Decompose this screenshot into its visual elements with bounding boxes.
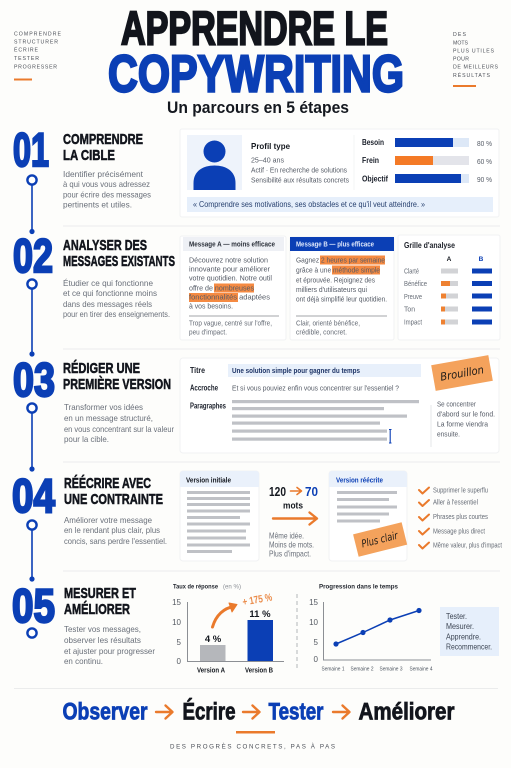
step 2 text: ANALYSER DES [63, 237, 147, 254]
bar chart: response rate: 5 [177, 638, 182, 647]
panel: message A: peu d'impact. [189, 330, 227, 336]
panel: analysis grid: Ton [404, 306, 415, 314]
panel: rewritten version [329, 471, 407, 561]
step 4 text: en le rendant plus clair, plus [64, 525, 160, 535]
step 2 text: et ce qui fonctionne moins [63, 288, 157, 298]
step 3 text [13, 353, 174, 444]
right top note [453, 32, 499, 87]
step 4 text: Améliorer votre message [64, 515, 152, 525]
right top note: POUR [453, 56, 469, 62]
panel: message A: innovante pour améliorer [189, 264, 270, 274]
step 5 text: observer les résultats [64, 635, 141, 645]
step 5 text: AMÉLIORER [64, 601, 130, 618]
left top note [14, 32, 62, 80]
word count change [269, 484, 318, 558]
panel: first draft: Titre [190, 366, 206, 375]
step 4 text: 04 [12, 469, 55, 522]
step 2 text: Étudier ce qui fonctionne [63, 278, 153, 288]
note: d'abord sur le fond. [437, 410, 495, 418]
profile text: Profil type [251, 141, 290, 151]
left top note: STRUCTURER [14, 40, 58, 46]
sticker: plus clair [353, 522, 407, 557]
bar chart: needs: 90 % [477, 175, 492, 184]
panel: target profile [180, 129, 499, 217]
panel: message A: votre quotidien. Notre outil [189, 274, 272, 282]
line chart: progression: 0 [314, 655, 319, 664]
panel: rewritten version: Version réécrite [336, 476, 383, 484]
panel: message B: crédible, concret. [296, 330, 347, 336]
line chart: progression: 5 [314, 638, 319, 647]
step 1 text: Identifier précisément [63, 169, 144, 179]
panel: message A: Trop vague, centré sur l'offre, [189, 320, 272, 328]
line chart: progression: Semaine 4 [410, 666, 433, 672]
step 5 text: et ajuster pour progresser [64, 646, 155, 656]
panel: analysis grid: Bénéfice [404, 281, 427, 288]
panel: message B: milliers d'utilisateurs qui [296, 285, 367, 294]
step 2 text: MESSAGES EXISTANTS [63, 253, 175, 270]
panel: analysis grid: A [447, 256, 452, 263]
panel: message A: offre de nombreuses [189, 284, 254, 292]
line chart: progression: Progression dans le temps [319, 584, 398, 590]
step 5 text: Tester vos messages, [64, 624, 141, 634]
step 3 text: pour la cible. [64, 434, 109, 444]
step 1 text: 01 [13, 123, 49, 176]
line chart: progression: 15 [309, 598, 319, 607]
line chart: progression [309, 584, 433, 672]
note: ensuite. [437, 430, 460, 438]
panel: message B: Message B — plus efficace [296, 240, 374, 248]
step 1 text: LA CIBLE [63, 147, 115, 164]
callout: test loop: Recommencer. [446, 642, 492, 652]
step 2 text: pour en tirer des enseignements. [63, 309, 170, 319]
right top note: PLUS UTILES [453, 48, 495, 54]
bar chart: response rate: 4 % [205, 634, 222, 645]
left top note: PROGRESSER [14, 64, 57, 70]
profile text: Sensibilité aux résultats concrets [251, 176, 349, 184]
step 3 text: 03 [13, 353, 55, 406]
panel: initial version [180, 471, 259, 561]
checklist: Message plus direct [433, 528, 485, 536]
arrow: growth [212, 606, 234, 627]
panel: initial version: Version initiale [186, 476, 231, 484]
panel: first draft: Accroche [190, 384, 219, 392]
profile text [251, 141, 349, 184]
right top note: DE MEILLEURS [453, 65, 499, 71]
footer tagline: DES PROGRÈS CONCRETS, PAS À PAS [170, 744, 335, 750]
note: La forme viendra [437, 420, 489, 428]
footer cycle: Améliorer [358, 698, 454, 726]
word count change: Même idée. [269, 530, 304, 540]
right top note: DES [453, 32, 467, 38]
bar chart: needs: Objectif [362, 174, 388, 184]
bar chart: response rate: 15 [172, 598, 182, 607]
bar chart: response rate: Taux de réponse [173, 584, 218, 590]
word count change: 120 [269, 484, 286, 499]
icon: persona [187, 135, 242, 190]
sticker: brouillon: Brouillon [439, 363, 485, 384]
growth label: + 175 % [242, 591, 274, 608]
footer cycle [62, 698, 454, 726]
panel: message A: Message A — moins efficace [189, 240, 275, 248]
timeline [27, 175, 37, 638]
sticker: brouillon [431, 355, 493, 391]
right top note: MOTS [453, 40, 469, 46]
callout: test loop: Apprendre. [446, 632, 481, 642]
step 1 text: pertinents et utiles. [63, 200, 132, 210]
line chart: progression: Semaine 2 [350, 666, 374, 672]
panel: first draft [180, 358, 499, 453]
note [437, 400, 495, 438]
panel: analysis grid: B [479, 256, 484, 263]
bar chart: response rate: (en %) [223, 584, 241, 590]
panel: message A: fonctionnalités adaptées [189, 292, 270, 302]
title: COPYWRITING [108, 46, 404, 104]
title [108, 2, 404, 104]
subtitle: Un parcours en 5 étapes [167, 98, 349, 117]
panel: message B [290, 237, 394, 340]
checklist: Supprimer le superflu [433, 488, 488, 494]
step 5 text: MESURER ET [64, 585, 136, 602]
left top note: TESTER [14, 56, 39, 62]
panel: analysis grid: Impact [404, 320, 422, 326]
panel: first draft: Une solution simple pour gagner du temps [232, 366, 360, 375]
callout: test loop [440, 607, 499, 656]
quote: « Comprendre ses motivations, ses obstacles et ce qu'il veut atteindre. » [193, 200, 426, 209]
bar chart: needs [362, 138, 492, 184]
step 3 text: en vous concentrant sur la valeur [64, 424, 174, 434]
step 1 text: COMPRENDRE [63, 131, 143, 148]
panel: message B: grâce à une méthode simple [296, 266, 380, 274]
step 2 text: dans des messages réels [63, 299, 152, 309]
line chart: progression: Semaine 3 [380, 666, 403, 672]
profile text: Actif · En recherche de solutions [251, 166, 347, 174]
step 5 text [12, 579, 155, 666]
bar chart: needs: Frein [362, 156, 379, 165]
panel: message B: Clair, orienté bénéfice, [296, 320, 360, 328]
word count change: mots [283, 500, 303, 512]
panel: message B: Gagnez 2 heures par semaine [296, 256, 385, 264]
bar chart: response rate: 0 [177, 657, 182, 666]
step 5 text: en continu. [64, 656, 103, 666]
step 4 text: concis, sans perdre l'essentiel. [64, 536, 167, 546]
word count change: Moins de mots. [269, 540, 314, 550]
step 3 text: RÉDIGER UNE [63, 360, 140, 377]
sticker: plus clair: Plus clair [360, 530, 400, 550]
step 3 text: PREMIÈRE VERSION [63, 376, 171, 393]
checklist: Aller à l'essentiel [433, 500, 478, 506]
step 4 text [12, 469, 167, 546]
right top note: RÉSULTATS [453, 72, 491, 79]
bar chart: needs: 60 % [477, 157, 492, 166]
callout: test loop: Mesurer. [446, 621, 474, 631]
panel: analysis grid: Grille d'analyse [404, 241, 455, 250]
note: Se concentrer [437, 400, 476, 408]
panel: message B: et éprouvée. Rejoignez des [296, 276, 375, 284]
step 1 text: à qui vous vous adressez [63, 179, 150, 189]
checklist: Phrases plus courtes [433, 514, 488, 521]
callout: test loop: Tester. [446, 611, 467, 621]
panel: analysis grid: Clarté [404, 268, 419, 276]
arrow [273, 512, 317, 524]
step 1 text: pour écrire des messages [63, 190, 151, 200]
step 3 text: en un message structuré, [64, 413, 153, 423]
step 2 text [13, 229, 175, 319]
bar chart: response rate: 11 % [249, 609, 271, 620]
bar chart: response rate [172, 584, 284, 674]
bar chart: response rate: Version B [245, 668, 273, 674]
bar chart: needs: Besoin [362, 138, 384, 147]
panel: first draft: Et si vous pouviez enfin vous concentrer sur l'essentiel ? [232, 384, 399, 392]
panel: analysis grid [398, 235, 500, 340]
title: APPRENDRE LE [121, 2, 388, 54]
panel: message A: à vos besoins. [189, 302, 233, 310]
step 5 text: 05 [12, 579, 55, 632]
panel: first draft: Paragraphes [190, 402, 226, 410]
panel: message B: ont déjà simplifié leur quotidien. [296, 294, 387, 304]
left top note: ÉCRIRE [14, 47, 39, 54]
word count change: Plus d'impact. [269, 548, 311, 558]
bar chart: needs: 80 % [477, 139, 492, 148]
line chart: progression: Semaine 1 [322, 666, 345, 672]
panel: message A [180, 236, 286, 340]
left top note: COMPRENDRE [14, 32, 62, 38]
step 3 text: Transformer vos idées [64, 402, 143, 412]
icon: text cursor [389, 430, 392, 443]
draft lines [232, 400, 419, 441]
profile text: 25–40 ans [251, 156, 284, 164]
line chart: progression: 10 [309, 618, 319, 627]
step 2 text: 02 [13, 229, 53, 282]
step 4 text: RÉÉCRIRE AVEC [64, 475, 151, 492]
quote [187, 197, 493, 212]
footer cycle: Tester [268, 698, 324, 726]
word count change: 70 [305, 484, 318, 499]
step 1 text [13, 123, 151, 210]
footer cycle: Observer [62, 698, 148, 726]
step 4 text: UNE CONTRAINTE [64, 491, 163, 508]
panel: message A: Découvrez notre solution [189, 256, 268, 264]
bar chart: response rate: 10 [172, 618, 182, 627]
footer cycle: Écrire [182, 698, 236, 726]
panel: analysis grid: Preuve [404, 294, 422, 301]
checklist [419, 488, 502, 550]
bar chart: response rate: Version A [197, 668, 225, 674]
